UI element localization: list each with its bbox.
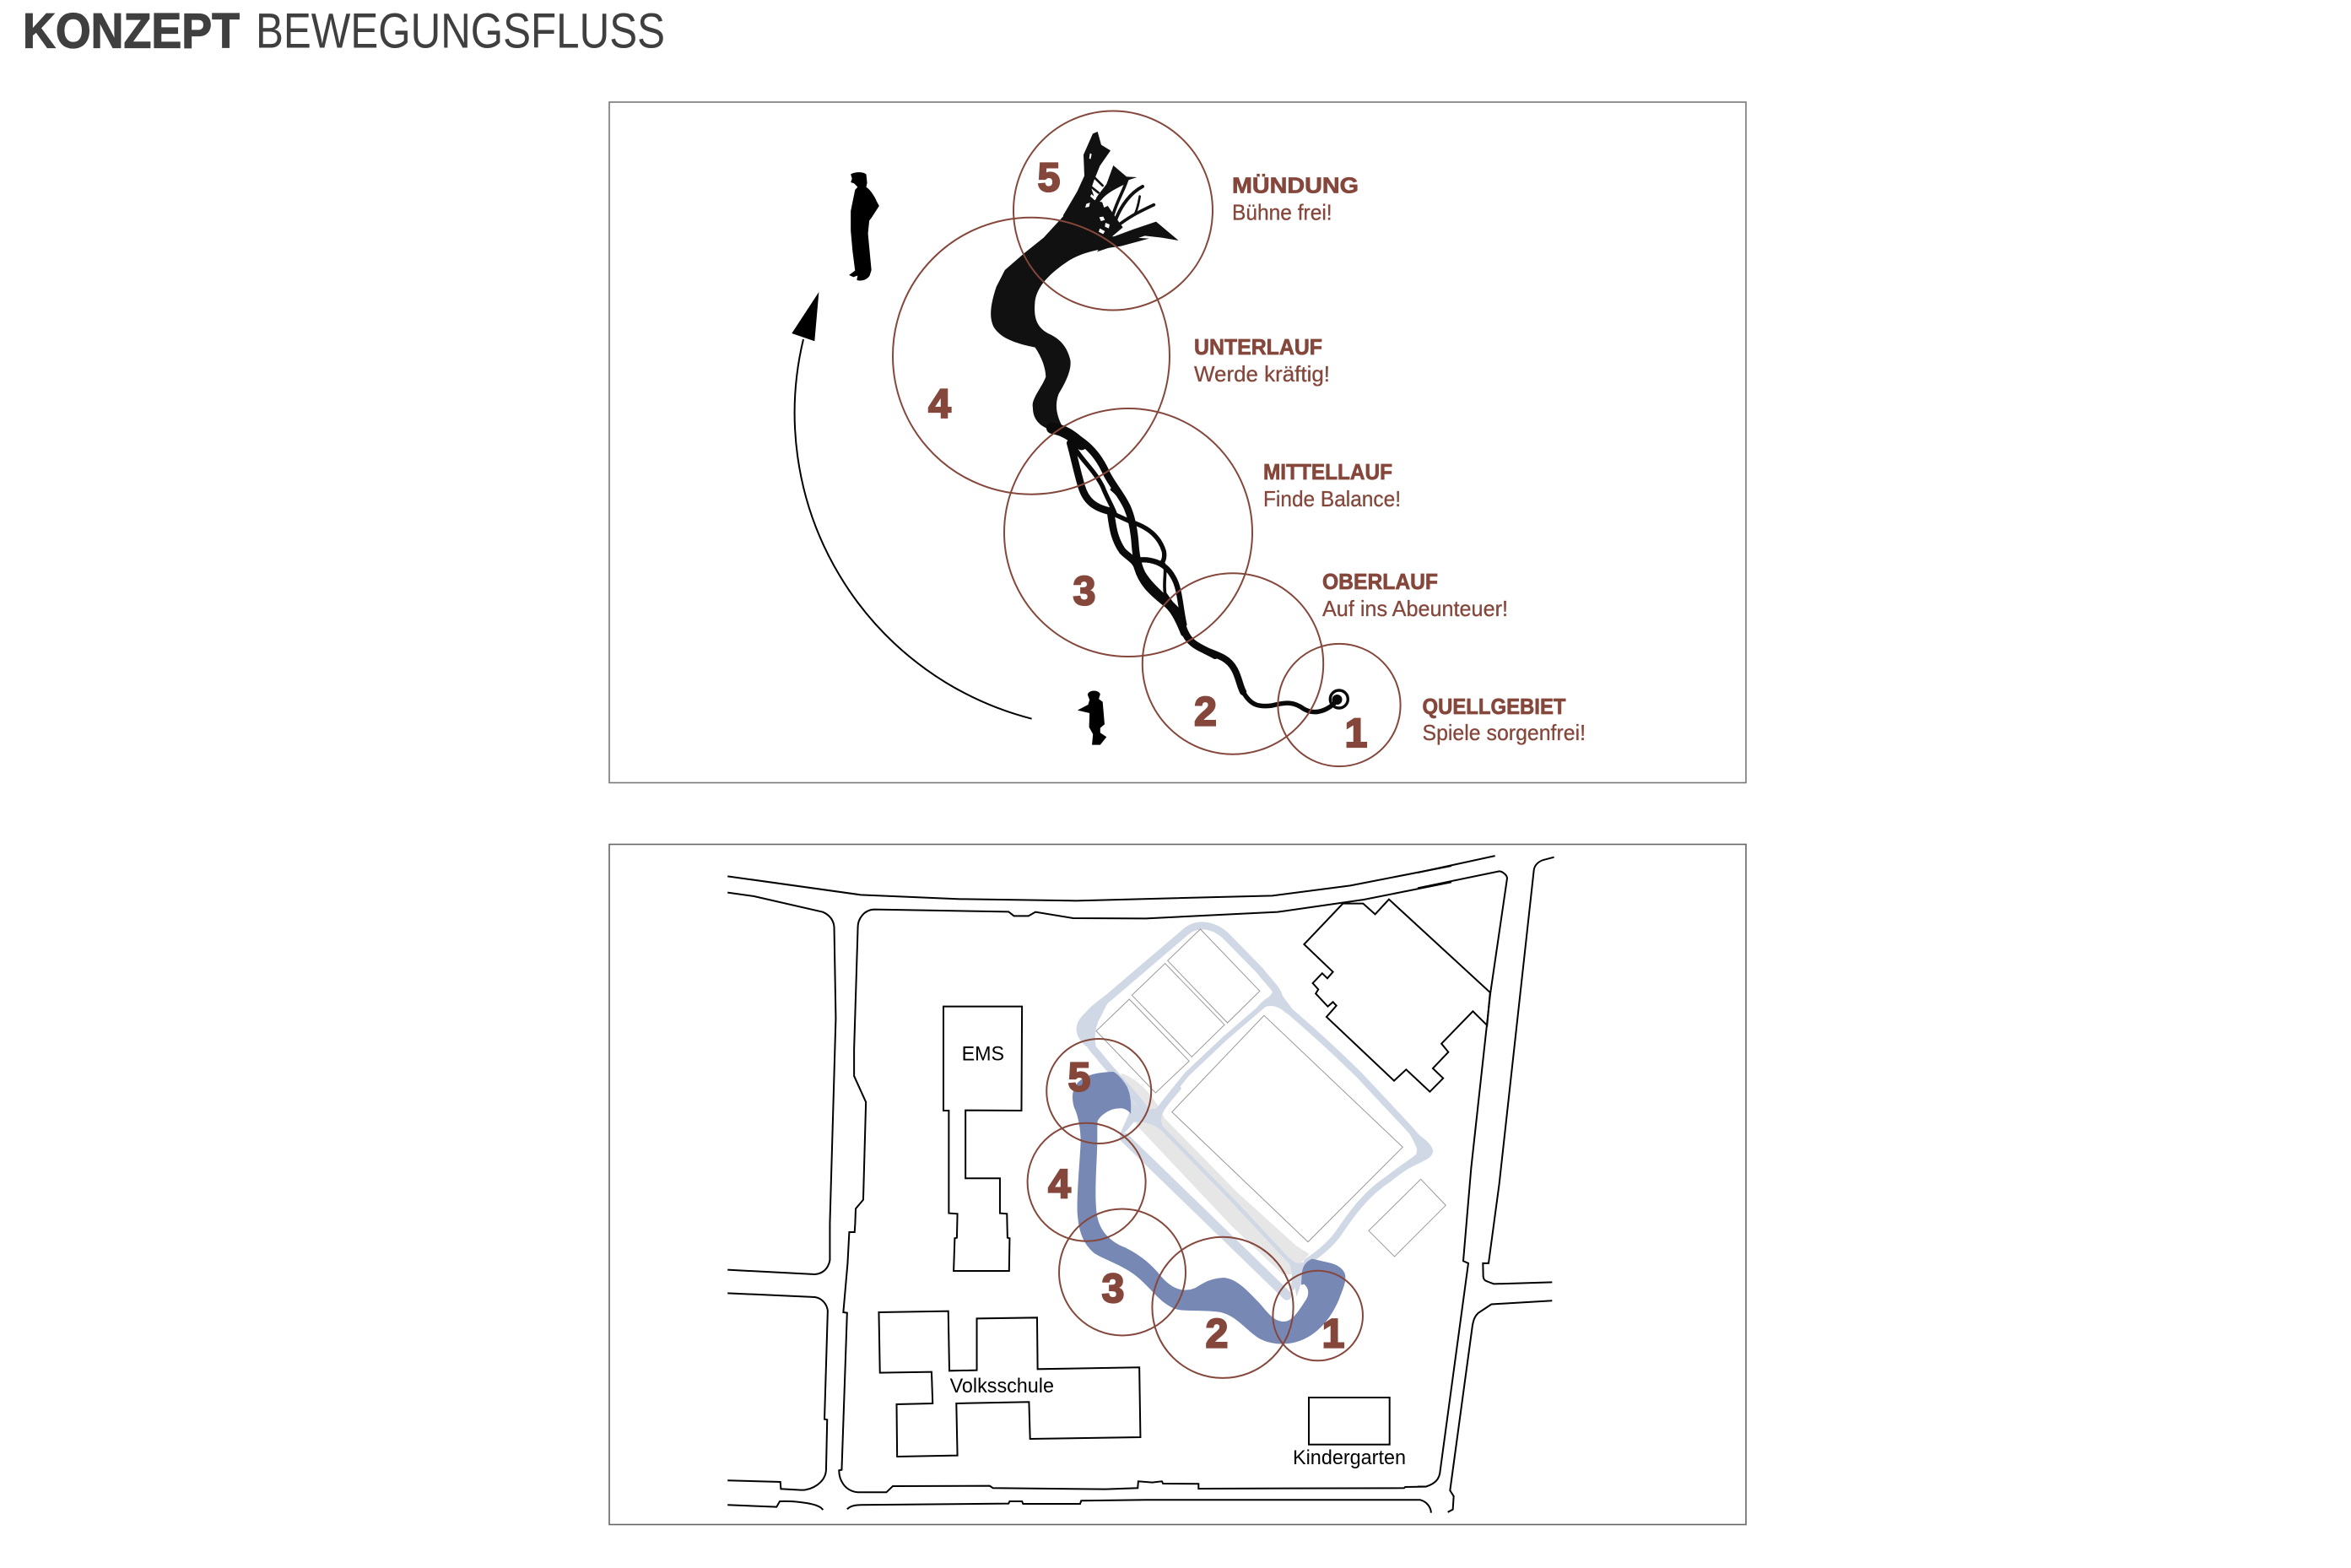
label: Oberlauf [1322, 569, 1508, 621]
stage numbers bottom: 5 [1068, 1055, 1090, 1100]
stage numbers bottom [1048, 1055, 1344, 1357]
river illustration [991, 132, 1348, 712]
growth arrow [792, 292, 1032, 719]
label: Quellgebiet: Spiele sorgenfrei! [1423, 720, 1586, 745]
building: Kindergarten [1309, 1398, 1390, 1445]
stage numbers bottom: 3 [1102, 1267, 1124, 1311]
title [23, 3, 665, 59]
stage numbers top [928, 155, 1367, 756]
grey central strip [1121, 1073, 1310, 1274]
pitches [1096, 929, 1446, 1257]
stage circles top [893, 111, 1401, 766]
stage numbers top: 2 [1194, 690, 1217, 734]
river source spiral [1330, 690, 1348, 708]
icon: child silhouette [1078, 690, 1106, 745]
river mouth delta [1063, 132, 1179, 251]
stage numbers top: 4 [928, 382, 951, 427]
building: Volksschule [878, 1311, 1140, 1457]
label: Quellgebiet: QUELLGEBIET [1423, 694, 1566, 719]
river upper course [1192, 643, 1338, 712]
stage numbers top: 3 [1073, 569, 1095, 614]
label: Unterlauf: Werde kräftig! [1194, 361, 1330, 387]
river lower course body [991, 205, 1149, 432]
label: Mündung: Bühne frei! [1232, 200, 1332, 225]
label: Mündung [1232, 173, 1359, 225]
stage circles bottom [1028, 1039, 1363, 1378]
river braided middle course [1052, 428, 1215, 656]
title: BEWEGUNGSFLUSS [256, 3, 665, 59]
stage numbers bottom: 1 [1322, 1311, 1344, 1357]
label: Mittellauf [1263, 459, 1401, 511]
movement path river shape [1073, 1072, 1345, 1344]
panel: river concept diagram [609, 102, 1746, 783]
label: Oberlauf: OBERLAUF [1322, 569, 1438, 594]
label: Unterlauf: UNTERLAUF [1194, 334, 1322, 360]
stage numbers bottom: 2 [1206, 1311, 1228, 1357]
label: Quellgebiet [1423, 694, 1586, 745]
building: EMS [943, 1007, 1022, 1271]
icon: adult silhouette [849, 172, 879, 281]
label: Kindergarten: Kindergarten [1293, 1446, 1406, 1469]
panel: site plan [609, 844, 1746, 1524]
label: Mittellauf: Finde Balance! [1263, 486, 1401, 511]
label: Oberlauf: Auf ins Abeunteuer! [1322, 596, 1508, 621]
light blue path network [1077, 926, 1433, 1297]
streets [727, 856, 1554, 1513]
building: sports hall [1304, 900, 1490, 1092]
label: EMS: EMS [962, 1043, 1004, 1065]
title: KONZEPT [23, 3, 240, 59]
panel frame top [609, 102, 1746, 783]
stage numbers bottom: 4 [1048, 1163, 1071, 1207]
label: Unterlauf [1194, 334, 1330, 387]
label: Volksschule: Volksschule [950, 1375, 1054, 1398]
panel frame bottom [609, 844, 1746, 1524]
stage numbers top: 5 [1038, 155, 1060, 201]
label: Mündung: MÜNDUNG [1232, 173, 1359, 198]
stage numbers top: 1 [1345, 711, 1367, 756]
label: Mittellauf: MITTELLAUF [1263, 459, 1392, 484]
